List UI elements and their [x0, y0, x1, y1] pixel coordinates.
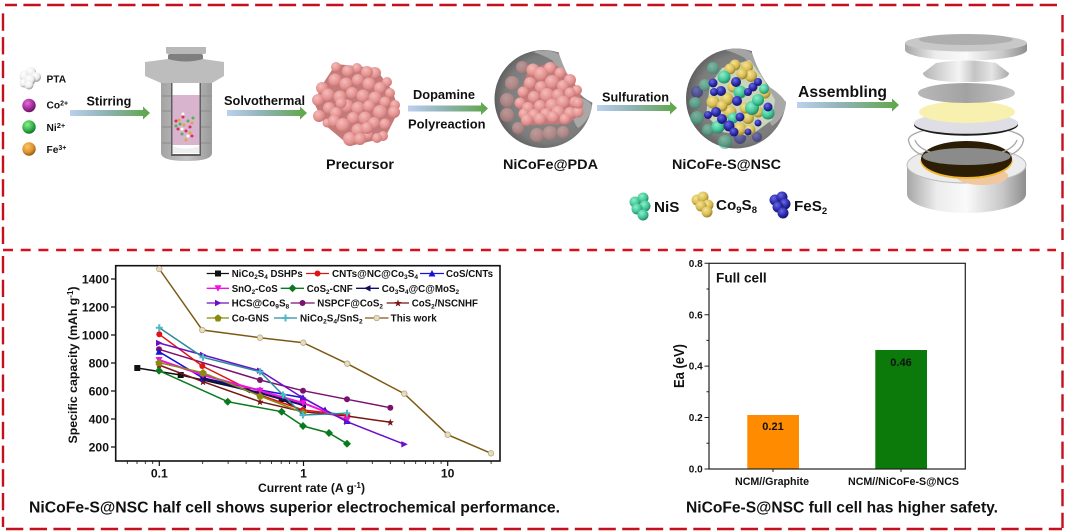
y axis tick labels: 1000	[82, 328, 109, 342]
bar chart y tick labels: 0.2	[689, 413, 703, 424]
precursor legend	[20, 67, 68, 156]
legend row 2: 2	[326, 289, 330, 296]
series: CoS/CNTs	[159, 352, 347, 421]
legend row 3: /NSCNHF	[435, 298, 478, 310]
label: Co9S8: 8	[752, 205, 757, 216]
label: Fe3+: 3+	[58, 145, 66, 152]
y axis tick labels	[82, 272, 109, 454]
bar chart y tick labels: 0.8	[689, 259, 703, 270]
legend row 4: 2	[323, 318, 327, 326]
caption: full cell: NiCoFe-S@NSC full cell has higher safety.	[686, 500, 998, 516]
arrow: stirring	[70, 106, 150, 120]
legend row 3: CoS	[412, 298, 431, 310]
chart legend	[207, 269, 494, 326]
label: NiS: NiS	[654, 199, 679, 216]
value: 0.21: 0.21	[762, 421, 784, 433]
bar: NCM//NiCoFe-S@NCS	[875, 350, 927, 469]
label: solvothermal: Solvothermal	[224, 93, 305, 108]
legend row 3: 2	[379, 304, 383, 310]
legend row 4: This work	[391, 314, 437, 324]
label: stirring: Stirring	[86, 94, 131, 108]
legend row 2: 3	[395, 289, 399, 296]
legend row 4: NiCo	[300, 314, 323, 324]
legend row 4: 4	[333, 318, 337, 326]
legend row 1: NiCo	[232, 269, 255, 280]
series: Co-GNS	[159, 363, 303, 413]
legend row 1: CoS/CNTs	[446, 269, 494, 280]
legend row 1: DSHPs	[268, 269, 303, 280]
x axis title: Current rate (A g	[258, 481, 356, 495]
series: NiCo2S4 DSHPs	[137, 368, 303, 412]
legend row 3: 2	[431, 304, 435, 310]
legend row 1: 2	[254, 274, 258, 281]
line series	[137, 269, 491, 453]
gasket ring	[908, 126, 1024, 155]
illustration: exploded coin cell	[905, 34, 1027, 213]
legend row 2: SnO	[232, 284, 252, 295]
legend row 3: HCS@Co	[232, 298, 275, 310]
legend row 2: 2	[252, 289, 256, 296]
y axis tick labels: 600	[89, 384, 109, 398]
label: precursor: Precursor	[326, 157, 394, 173]
legend row 3: 9	[275, 304, 279, 310]
illustration: NiCoFe-S@NSC hollow sphere	[686, 38, 805, 149]
legend row 2: S	[398, 284, 405, 295]
series: CNTs@NC@Co3S4	[159, 334, 347, 415]
label: polyreaction: Polyreaction	[408, 116, 486, 132]
y axis tick labels: 800	[89, 356, 109, 370]
bar chart y tick labels: 0.4	[689, 362, 703, 373]
series: SnO2-CoS	[159, 360, 347, 420]
y axis tick labels: 200	[89, 440, 109, 454]
legend row 1	[207, 269, 494, 281]
legend row 2: 2	[456, 289, 460, 296]
series: NSPCF@CoS2	[159, 349, 390, 408]
icon: Co9S8 cluster	[692, 192, 714, 218]
legend row 2: -CNF	[330, 284, 353, 295]
legend row 2	[207, 284, 460, 296]
legend row 3: S	[279, 298, 286, 310]
legend row 2: CoS	[307, 284, 326, 295]
separator	[914, 113, 1018, 136]
label: Fe3+: Fe	[46, 145, 58, 156]
y axis tick labels: 1200	[82, 300, 109, 314]
legend row 1: 4	[414, 274, 418, 281]
legend row 2: @C@MoS	[409, 284, 456, 295]
legend row 4: S	[327, 314, 334, 324]
legend row 1: S	[258, 269, 265, 280]
label: sulfuration: Sulfuration	[602, 90, 669, 104]
icon: NiS cluster	[630, 192, 650, 220]
legend row 1: CNTs@NC@Co	[332, 269, 403, 280]
y axis tick labels: 1400	[82, 272, 109, 286]
x axis tick labels: 10	[441, 466, 455, 480]
panel: synthesis flow	[20, 34, 1027, 220]
icon: Co sphere	[22, 99, 36, 112]
grey spacer disc	[918, 83, 1015, 103]
x label: NCM//Graphite: NCM//Graphite	[735, 476, 809, 488]
legend row 3	[207, 298, 478, 310]
legend row 1: 4	[264, 274, 268, 281]
x axis title: )	[361, 481, 365, 495]
bar: NCM//Graphite	[747, 415, 799, 469]
label: Ni2+: Ni	[46, 123, 57, 134]
x axis title: -1	[354, 481, 361, 490]
label: Ni2+: 2+	[57, 121, 66, 130]
y axis title: )	[66, 286, 80, 291]
legend row 1: 3	[404, 274, 408, 281]
legend row 3: NSPCF@CoS	[317, 298, 380, 310]
legend row 2: Co	[382, 284, 395, 295]
label: assembling: Assembling	[798, 84, 887, 101]
legend row 3: 8	[286, 304, 290, 310]
icon: Ni sphere	[22, 120, 36, 134]
icon: hydrothermal reactor	[145, 47, 224, 161]
y axis title: Ea: Ea (eV)	[672, 344, 688, 388]
x axis tick labels: 0.1	[151, 466, 168, 480]
series: CoS2/NSCNHF	[159, 365, 390, 422]
label: Co9S8: S	[742, 197, 752, 214]
series: CoS2-CNF	[159, 371, 347, 444]
series: Co3S4@C@MoS2	[203, 378, 303, 405]
label: NiCoFe-S@NSC: NiCoFe-S@NSC	[672, 157, 781, 173]
series: HCS@Co9S8	[159, 343, 404, 444]
legend row 1: S	[408, 269, 415, 280]
bar chart axes	[704, 263, 965, 472]
illustration: precursor particle	[312, 62, 400, 146]
label: Co9S8: Co	[716, 197, 736, 214]
label: FeS2: FeS	[794, 198, 822, 215]
dashed frame: bottom panel	[3, 252, 1062, 529]
legend row 4	[207, 314, 437, 326]
arrow: assembling	[797, 98, 899, 112]
icon: Fe sphere	[22, 142, 36, 156]
label: PTA: PTA	[46, 74, 67, 86]
icon: PTA cluster	[20, 67, 41, 90]
label: Co9S8: 9	[736, 205, 742, 216]
legend row 4: 2	[359, 318, 363, 326]
label: Co2+: Co	[46, 100, 60, 112]
label: NiCoFe@PDA: NiCoFe@PDA	[503, 157, 598, 173]
series: NiCo2S4/SnS2	[159, 328, 347, 415]
panel: full cell bar chart	[672, 259, 998, 516]
legend row 2: -CoS	[255, 284, 278, 295]
chart axes	[111, 266, 500, 466]
top cap	[905, 34, 1027, 60]
chart label: full cell: Full cell	[716, 270, 767, 286]
legend row 2: 4	[405, 289, 409, 296]
yellow cathode	[919, 101, 1015, 123]
bar chart y tick labels: 0.0	[689, 464, 703, 476]
series: This work	[159, 269, 491, 453]
anode disc	[921, 141, 1012, 177]
y axis title: Specific capacity (mAh g	[66, 297, 80, 444]
icon: FeS2 cluster	[770, 192, 790, 218]
legend row 4: /SnS	[337, 314, 360, 324]
bar chart y tick labels	[689, 259, 703, 476]
legend row 4: Co-GNS	[232, 314, 269, 324]
label: FeS2: 2	[822, 206, 827, 217]
arrow: sulfuration	[597, 102, 677, 114]
panel: half cell rate chart	[29, 266, 560, 516]
x axis tick labels: 1	[300, 466, 307, 480]
bar chart y tick labels: 0.6	[689, 310, 703, 321]
illustration: NiCoFe@PDA hollow sphere	[494, 40, 612, 148]
arrow: dopamine	[408, 102, 488, 115]
value: 0.46: 0.46	[890, 357, 912, 369]
y axis title: -1	[66, 290, 75, 298]
battery case	[907, 143, 1026, 213]
spring	[923, 60, 1009, 82]
x axis tick labels	[151, 466, 455, 480]
y axis tick labels: 400	[89, 412, 109, 426]
dashed frame: top panel	[3, 5, 1062, 250]
caption: half cell: NiCoFe-S@NSC half cell shows superior electrochemical performance.	[29, 500, 560, 516]
label: Co2+: 2+	[60, 100, 68, 108]
arrow: solvothermal	[227, 106, 307, 120]
x label: NCM//NiCoFe-S@NCS: NCM//NiCoFe-S@NCS	[848, 476, 959, 488]
label: dopamine: Dopamine	[413, 87, 475, 102]
